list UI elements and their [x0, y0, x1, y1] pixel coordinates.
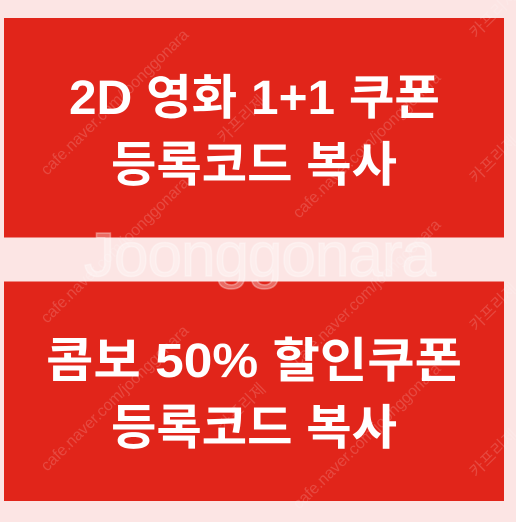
watermark: Joonggonara logo: Joonggonara	[84, 221, 437, 290]
watermark: cafe address and brand repeated diagonally: cafe.naver.com/joonggonara	[38, 174, 193, 327]
heading: 2D movie 1+1 coupon: 2D 영화 1+1 쿠폰	[69, 72, 440, 125]
watermark: cafe address and brand repeated diagonally: 카프리제	[214, 92, 270, 147]
watermark: cafe address and brand repeated diagonally: cafe.naver.com/joonggonara	[38, 26, 193, 179]
watermark: cafe address and brand repeated diagonally: cafe.naver.com/joonggonara	[38, 322, 193, 475]
panel: combo 50% discount coupon button	[4, 282, 504, 501]
text: copy registration code: 등록코드 복사	[111, 139, 397, 192]
watermark: cafe address and brand repeated diagonally: 카프리제	[214, 380, 270, 435]
text: copy registration code: 등록코드 복사	[111, 402, 397, 455]
watermark: cafe address and brand repeated diagonally: cafe.naver.com/joonggonara	[290, 216, 445, 369]
heading: combo 50% discount coupon: 콤보 50% 할인쿠폰	[46, 335, 462, 388]
watermark: cafe address and brand repeated diagonally: cafe.naver.com/joonggonara	[290, 69, 445, 222]
panel: 2D movie coupon button	[4, 18, 504, 238]
watermark: cafe address and brand repeated diagonally: cafe.naver.com/joonggonara	[290, 360, 445, 513]
